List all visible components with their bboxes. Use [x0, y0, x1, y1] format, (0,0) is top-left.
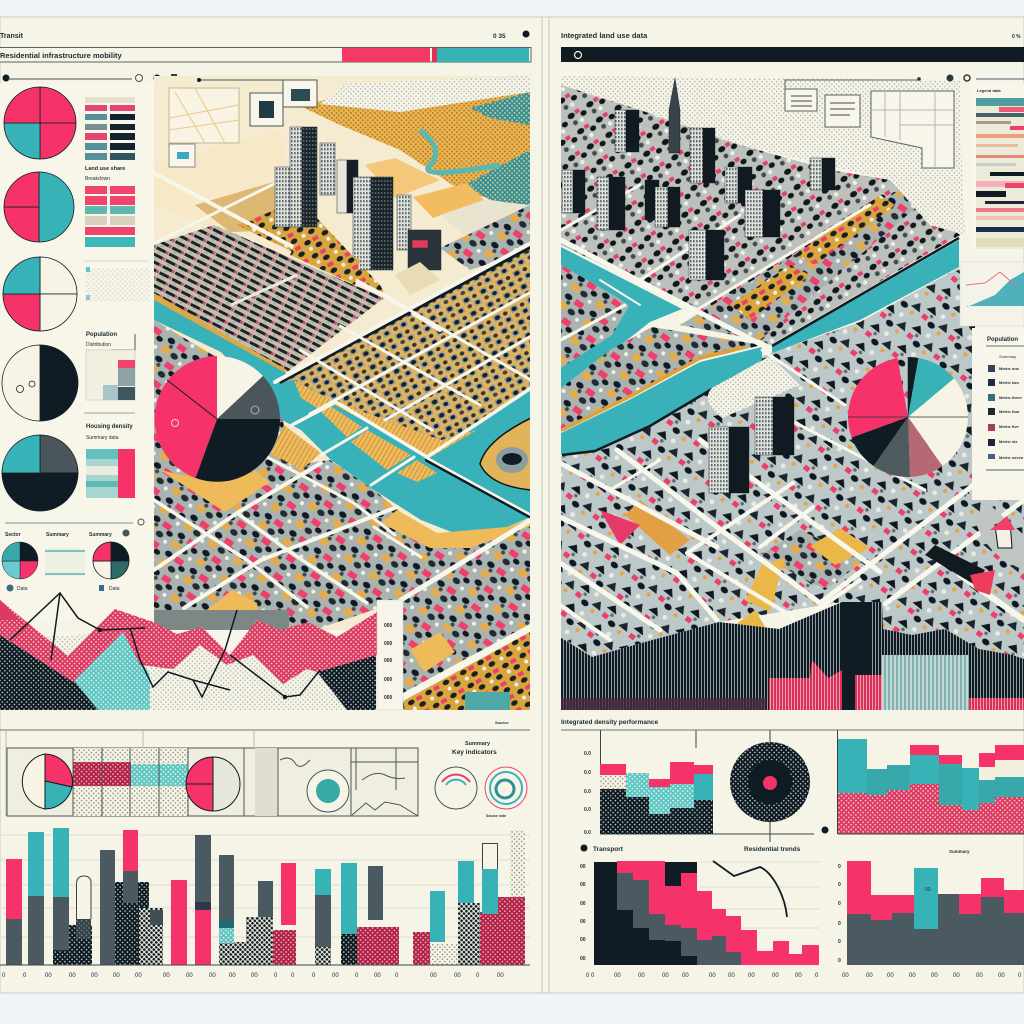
chart D bars: [838, 849, 1024, 965]
left header bar: Residential infrastructure mobility: [0, 51, 123, 60]
left city island: [561, 265, 629, 368]
pie 1: [4, 87, 76, 159]
right small area chart: [960, 262, 1024, 326]
rule: [0, 729, 530, 731]
mini charts row: Summary: [89, 532, 112, 538]
right map roads: [560, 185, 1024, 640]
table 2: Land use share: [85, 166, 125, 172]
x axis labels: [2, 973, 504, 979]
sidebar timeline: [2, 74, 177, 82]
x axis labels: 0: [291, 973, 295, 979]
x axis labels: 0: [274, 973, 278, 979]
chart D axis labels: [842, 973, 1022, 979]
chart C falling bars: 00: [580, 937, 586, 943]
table 2: [85, 166, 135, 247]
ring chart one: [435, 767, 477, 809]
x axis labels: 00: [430, 973, 437, 979]
inset blue thumb: [169, 144, 195, 167]
x axis labels: 00: [209, 973, 216, 979]
river: [154, 300, 531, 533]
ring chart two: [485, 767, 527, 809]
chart B stacked bars: [838, 730, 1024, 834]
flowers strip: [290, 245, 440, 295]
chart D axis labels: 00: [842, 973, 849, 979]
x axis labels: 00: [186, 973, 193, 979]
vertical legend column: 000: [384, 641, 393, 647]
chart C axis labels: 00: [748, 973, 755, 979]
legend labels: Metric five: [999, 424, 1020, 429]
bottom left bar chart: [0, 828, 530, 979]
right sidebar stripe table: [972, 79, 1024, 249]
table 4: Population: [86, 332, 117, 338]
chart A stacked bars: 0.0: [584, 830, 591, 836]
x axis labels: 0: [355, 973, 359, 979]
chart D axis labels: 00: [909, 973, 916, 979]
strip chart box: [6, 730, 418, 816]
trend line: [713, 861, 787, 917]
vertical legend column: 000: [384, 695, 393, 701]
x axis labels: 00: [163, 973, 170, 979]
vertical legend column: 000: [384, 677, 393, 683]
rings sublabel: Key indicators: [452, 749, 497, 756]
chart C axis labels: 00: [614, 973, 621, 979]
mini table: [45, 548, 85, 576]
map insets left: [169, 78, 317, 167]
chart D axis labels: 00: [866, 973, 873, 979]
table 2: Breakdown: [85, 176, 110, 182]
x axis labels: 00: [135, 973, 142, 979]
panel: left sidebar: [0, 84, 154, 620]
strip pie left: [22, 754, 72, 809]
chart C axis labels: 00: [728, 973, 735, 979]
swirl road: [708, 356, 800, 418]
strip pie right: [186, 757, 240, 811]
residential rows block: [154, 225, 384, 378]
x axis labels: 0: [395, 973, 399, 979]
x axis labels: 0: [476, 973, 480, 979]
chart A stacked bars: 0.0: [584, 807, 591, 813]
chart A stacked bars: 0.0: [584, 789, 591, 795]
baseline: [0, 964, 530, 966]
right sidebar stripe table: Legend data: [977, 88, 1001, 93]
right buildings: [562, 78, 835, 493]
chart C axis labels: 0 0: [586, 973, 595, 979]
halftone plain: [300, 76, 530, 210]
chart A stacked bars: [584, 730, 814, 836]
chart D axis labels: 00: [953, 973, 960, 979]
chart D bars: 0: [838, 939, 841, 945]
rings label: Summary: [465, 741, 491, 747]
left header: [0, 33, 531, 82]
legend labels: Metric three: [999, 395, 1022, 400]
x axis labels: 0: [23, 973, 27, 979]
chart C falling bars: 00: [580, 882, 586, 888]
legend labels: Metric six: [999, 439, 1018, 444]
big right pie chart: [848, 357, 968, 477]
yellow block band: [680, 190, 925, 340]
table 5: [84, 413, 135, 498]
round plaza: [480, 418, 531, 490]
orange plots: [365, 158, 530, 236]
halftone mountain chart: [0, 593, 377, 710]
grid lines: [0, 835, 530, 937]
halftone groups: [68, 830, 525, 965]
line graph: [10, 593, 320, 698]
gold strips: [271, 380, 477, 482]
gold edge stripe: [562, 347, 745, 430]
mini charts row: Summary: [46, 532, 69, 538]
legend labels: Metric two: [999, 380, 1019, 385]
table 5: Housing density: [86, 424, 133, 430]
chart A stacked bars: 0.0: [584, 770, 591, 776]
x axis labels: 00: [497, 973, 504, 979]
chart C heading: [580, 844, 801, 853]
right header bar: [561, 47, 1024, 62]
pie 5: [2, 435, 78, 511]
right legend panel: Summary: [999, 354, 1016, 359]
right page title: Integrated land use data: [561, 31, 648, 40]
mini pie right: [93, 542, 129, 579]
callout boxes: [785, 78, 954, 168]
building cluster: [275, 127, 441, 270]
pie 4: [2, 345, 78, 421]
chart C axis labels: 00: [709, 973, 716, 979]
mini charts row: Sector: [5, 532, 21, 538]
right header tag: 0 %: [1012, 34, 1021, 40]
sidebar bottom mask: [0, 600, 20, 620]
right header: [522, 30, 1024, 168]
chart D axis labels: 0: [1018, 973, 1022, 979]
panel: left isometric map: [154, 76, 531, 710]
lower city: [561, 268, 1024, 660]
chart D axis labels: 00: [931, 973, 938, 979]
circular housing cluster: [925, 505, 1024, 595]
vertical legend column: [377, 600, 403, 710]
upper city blocks: [561, 85, 960, 345]
rule: [561, 729, 1024, 731]
barcode skyline: [560, 602, 1024, 710]
inset map: [169, 88, 239, 143]
chart D bars: 0: [838, 882, 841, 888]
chart C axis labels: 00: [682, 973, 689, 979]
inset dark thumb: [250, 93, 283, 126]
x axis labels: 00: [69, 973, 76, 979]
chart D bars: 0: [838, 958, 841, 964]
top annotation dots: [946, 74, 970, 82]
vertical legend column: 000: [384, 658, 393, 664]
panel: right isometric map: [560, 76, 1024, 710]
x axis labels: 00: [332, 973, 339, 979]
chart C falling bars: 00: [580, 901, 586, 907]
chart C falling bars: [580, 861, 820, 965]
x axis labels: 0: [312, 973, 316, 979]
legend swatches: [988, 365, 995, 459]
mini legends: Data: [17, 586, 28, 592]
left header tag: 0 35: [493, 33, 506, 40]
x axis labels: 00: [91, 973, 98, 979]
chart C axis labels: 00: [772, 973, 779, 979]
tree row: [195, 180, 387, 297]
big left pie chart: [155, 356, 280, 482]
left page title: Transit: [0, 33, 24, 40]
bottom right section: [561, 719, 1024, 979]
ring caption: Source note: [486, 814, 506, 818]
line sketches: [280, 758, 418, 816]
x axis labels: 00: [374, 973, 381, 979]
black bank: [562, 238, 959, 455]
chart C falling bars: 00: [580, 956, 586, 962]
faded table 3: [84, 261, 150, 301]
x axis labels: 00: [45, 973, 52, 979]
chart D axis labels: 00: [887, 973, 894, 979]
solid bars: [6, 828, 498, 965]
table 4: [86, 332, 135, 400]
table 4: Distribution: [86, 342, 111, 348]
pie 3: [3, 257, 77, 331]
legend labels: Metric seven: [999, 455, 1024, 460]
chart D bars: 0: [838, 921, 841, 927]
mid island: [561, 327, 762, 432]
dot left of divider: [522, 30, 530, 38]
gold block grid: [281, 205, 531, 457]
chart C heading: Residential trends: [744, 846, 801, 853]
pie 2: [4, 172, 74, 242]
chart D axis labels: 00: [998, 973, 1005, 979]
left header bar: [0, 48, 531, 62]
halftone sky: [561, 76, 960, 240]
mini charts row: [2, 519, 144, 592]
chart D bars: Summary: [949, 849, 970, 854]
x axis labels: 0: [2, 973, 6, 979]
x axis labels: 00: [454, 973, 461, 979]
right river: [772, 240, 959, 353]
river left band: [561, 247, 682, 390]
bottom left section: [0, 720, 530, 818]
teal dial: [307, 770, 349, 812]
chart C axis labels: 0: [815, 973, 819, 979]
chart C axis labels: [586, 973, 819, 979]
table 5: Summary data: [86, 435, 119, 441]
gold land patches: [160, 470, 531, 710]
chart D bars: 00: [925, 887, 931, 893]
map ground: [154, 76, 529, 630]
right legend panel: [972, 328, 1024, 500]
x axis labels: 00: [229, 973, 236, 979]
mini pie left: [2, 542, 38, 579]
mini legends: [6, 584, 120, 592]
chart A stacked bars: 0.0: [584, 751, 591, 757]
right legend panel: Population: [987, 337, 1018, 343]
gold blocks lower: [600, 500, 870, 640]
chart D bars: 0: [838, 901, 841, 907]
section title: Integrated density performance: [561, 719, 659, 726]
legend labels: [999, 366, 1024, 460]
inset top thumb: [197, 78, 317, 107]
table 1: [85, 97, 135, 160]
radial dot chart: [730, 730, 828, 842]
mini legends: Data: [109, 586, 120, 592]
panel divider: [542, 17, 549, 993]
chart D axis labels: 00: [976, 973, 983, 979]
chart D bars: 0: [838, 864, 841, 870]
left map roads: [154, 173, 531, 697]
chart C heading: Transport: [593, 846, 624, 853]
right grey halftone: [890, 120, 965, 235]
chart C axis labels: 00: [638, 973, 645, 979]
legend labels: Metric four: [999, 409, 1020, 414]
chart C falling bars: 00: [580, 864, 586, 870]
chart C falling bars: 00: [580, 919, 586, 925]
chart C axis labels: 00: [662, 973, 669, 979]
lower left block: [154, 320, 531, 710]
legend labels: Metric one: [999, 366, 1020, 371]
lower river: [561, 347, 762, 455]
vertical legend column: 000: [384, 623, 393, 629]
x axis labels: 00: [251, 973, 258, 979]
chart C axis labels: 00: [795, 973, 802, 979]
section tag: Source: [495, 720, 509, 725]
x axis labels: 00: [113, 973, 120, 979]
